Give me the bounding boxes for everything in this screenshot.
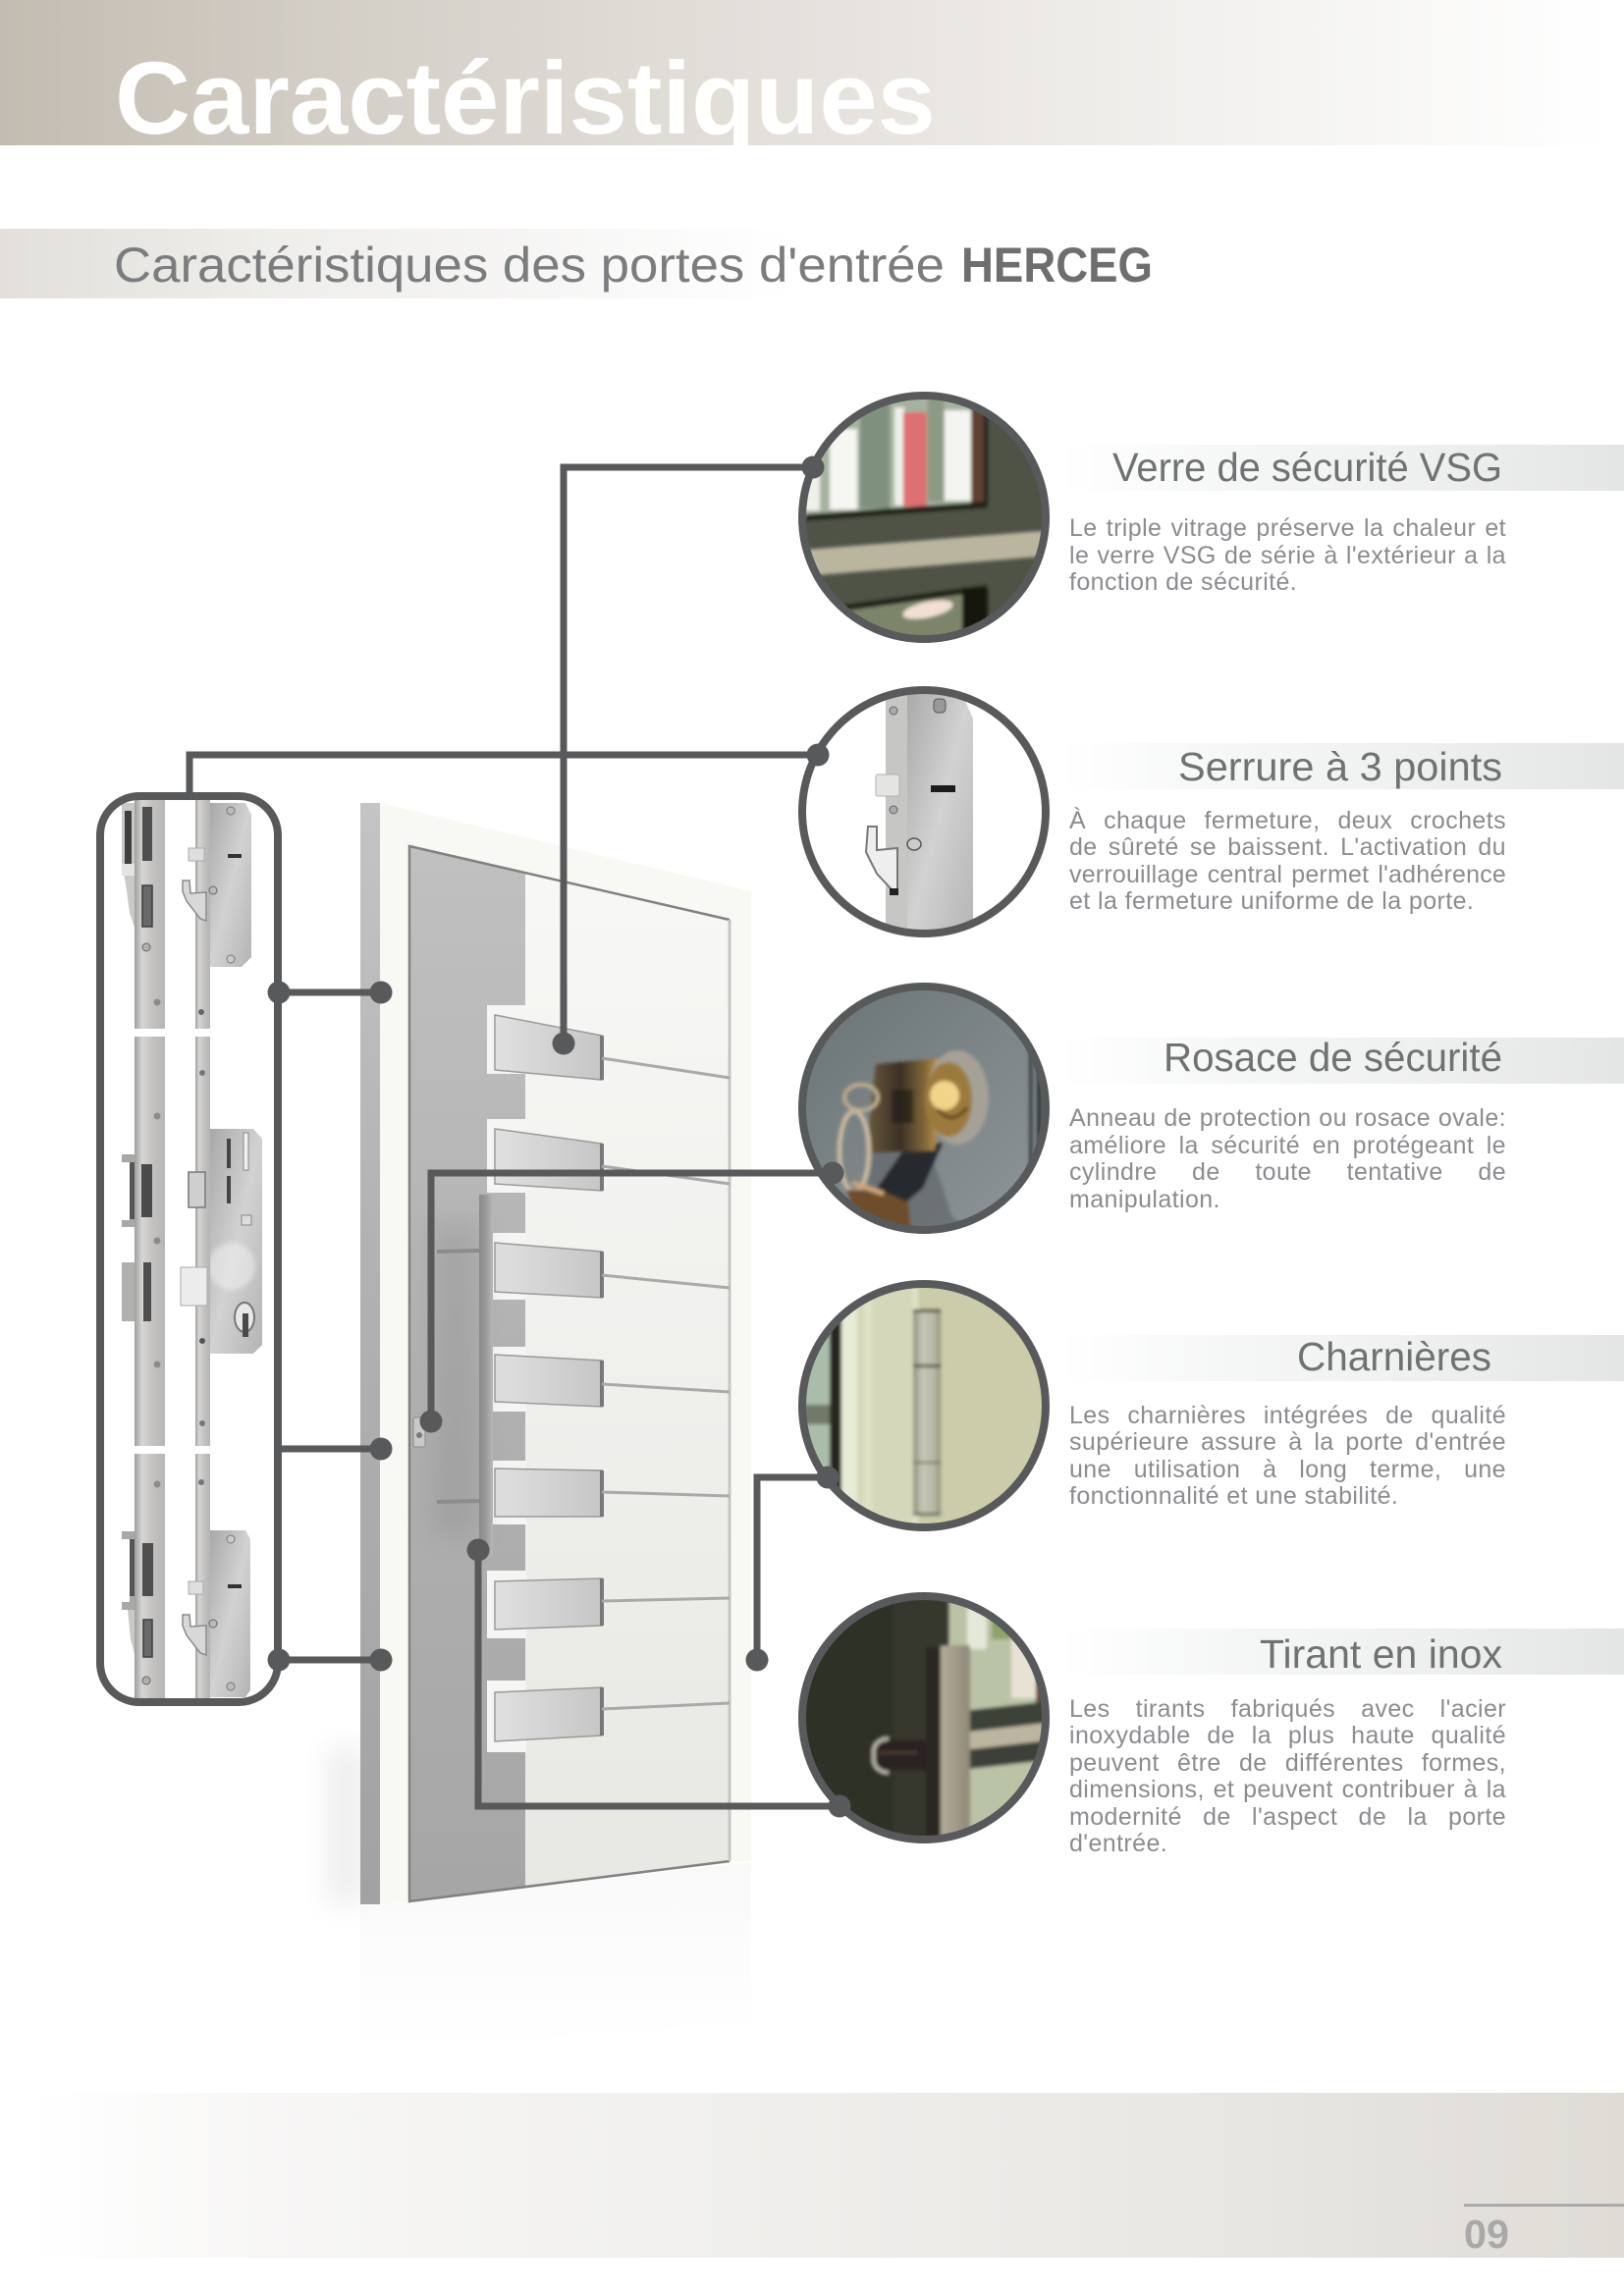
text block: de sûreté se baissent. L'activation du [1069, 833, 1506, 861]
text block: d'entrée. [1069, 1830, 1167, 1857]
text block [1069, 1402, 1506, 1510]
text block: Les charnières intégrées de qualité [1069, 1402, 1506, 1429]
connector: lock [189, 755, 818, 794]
connector: pull handle [478, 1550, 839, 1806]
text block: Le triple vitrage préserve la chaleur et [1069, 514, 1506, 542]
lock panel outline [100, 796, 278, 1702]
glazing slots [487, 1005, 730, 1752]
page number text: 09 [1464, 2212, 1509, 2257]
lower latch [122, 1531, 135, 1610]
text block: supérieure assure à la porte d'entrée [1069, 1428, 1506, 1456]
panel: verre de sécurité [1069, 445, 1624, 596]
door side edge [360, 803, 380, 1904]
page title: Caractéristiques [115, 41, 936, 156]
text block: dimensions, et peuvent contribuer à la [1069, 1776, 1506, 1803]
text block [1069, 1104, 1506, 1213]
footer band [0, 2093, 1624, 2258]
handle shadow [432, 1222, 479, 1536]
multipoint lock photos [100, 796, 278, 1702]
text block: améliore la sécurité en protégeant le [1069, 1131, 1506, 1158]
heading band [1060, 445, 1624, 491]
lock: left faceplate strip [122, 800, 165, 1698]
photo: hinges [795, 1276, 1053, 1533]
door reflection [360, 1862, 751, 2052]
door frame [380, 803, 751, 1904]
heading band [1060, 1629, 1624, 1675]
connector: glass [564, 467, 813, 1043]
heading: Serrure à 3 points [1178, 744, 1502, 789]
subtitle: Caractéristiques des portes d'entrée [114, 238, 945, 293]
door leaf [409, 846, 730, 1901]
panel: charnières [1069, 1334, 1624, 1510]
lower hook and latch [189, 1581, 203, 1594]
subtitle band [0, 229, 795, 298]
photo: 3-point lock [795, 683, 1053, 942]
text block: verrouillage central permet l'adhérence [1069, 861, 1506, 888]
heading band [1060, 1038, 1624, 1084]
text block [1069, 514, 1506, 596]
text block: cylindre de toute tentative de [1069, 1158, 1506, 1186]
text block: fonctionnalité et une stabilité. [1069, 1482, 1398, 1510]
text block: inoxydable de la plus haute qualité [1069, 1722, 1506, 1749]
panel: rosace [1069, 1035, 1624, 1213]
panel: serrure [1069, 743, 1624, 915]
upper latch [122, 803, 135, 928]
central latch [122, 1154, 135, 1227]
header band [0, 0, 1624, 145]
connector: hinges [757, 1477, 828, 1660]
text block: une utilisation à long terme, une [1069, 1456, 1506, 1483]
connector dots [267, 455, 850, 1818]
lock cylinder [413, 1417, 425, 1447]
door ambient shadow [329, 1747, 362, 1904]
heading: Charnières [1297, 1334, 1491, 1379]
connector: lock to door middle [282, 1445, 381, 1453]
grey door strip [409, 846, 525, 1901]
subtitle: HERCEG [961, 238, 1153, 293]
diagram: door, lock, connectors and detail photos [96, 392, 1050, 1904]
text block: manipulation. [1069, 1186, 1220, 1213]
text block: le verre VSG de série à l'extérieur a la [1069, 542, 1506, 569]
connector: rosette [431, 1173, 833, 1421]
lock: right faceplate strip and case [181, 800, 262, 1698]
text block [1069, 807, 1506, 915]
heading: Rosace de sécurité [1164, 1035, 1502, 1080]
connector: lock to door bottom [279, 1657, 381, 1663]
photo: stainless pull handle [795, 1590, 1056, 1851]
text block: peuvent être de différentes formes, [1069, 1749, 1506, 1777]
text block: et la fermeture uniforme de la porte. [1069, 887, 1474, 915]
door pull handle [437, 1195, 493, 1555]
photo: security rosette [795, 980, 1053, 1239]
heading band [1060, 1335, 1624, 1381]
text block: modernité de l'aspect de la porte [1069, 1803, 1506, 1831]
connector: lock to door top [279, 989, 381, 995]
photo: security glass [795, 389, 1053, 648]
leaf outline [409, 846, 730, 1901]
connector lines [189, 467, 839, 1806]
text block: À chaque fermeture, deux crochets [1069, 807, 1506, 834]
central lock [189, 1172, 205, 1207]
door illustration [329, 803, 751, 2052]
text block: fonction de sécurité. [1069, 568, 1297, 596]
text block: Les tirants fabriqués avec l'acier [1069, 1695, 1506, 1723]
heading: Tirant en inox [1260, 1631, 1502, 1677]
page number [1464, 2204, 1624, 2257]
text block [1069, 1695, 1506, 1857]
page number rule [1464, 2204, 1624, 2207]
heading: Verre de sécurité VSG [1112, 445, 1502, 490]
heading band [1060, 743, 1624, 789]
text block: Anneau de protection ou rosace ovale: [1069, 1104, 1506, 1132]
upper hook and latch [189, 848, 204, 861]
